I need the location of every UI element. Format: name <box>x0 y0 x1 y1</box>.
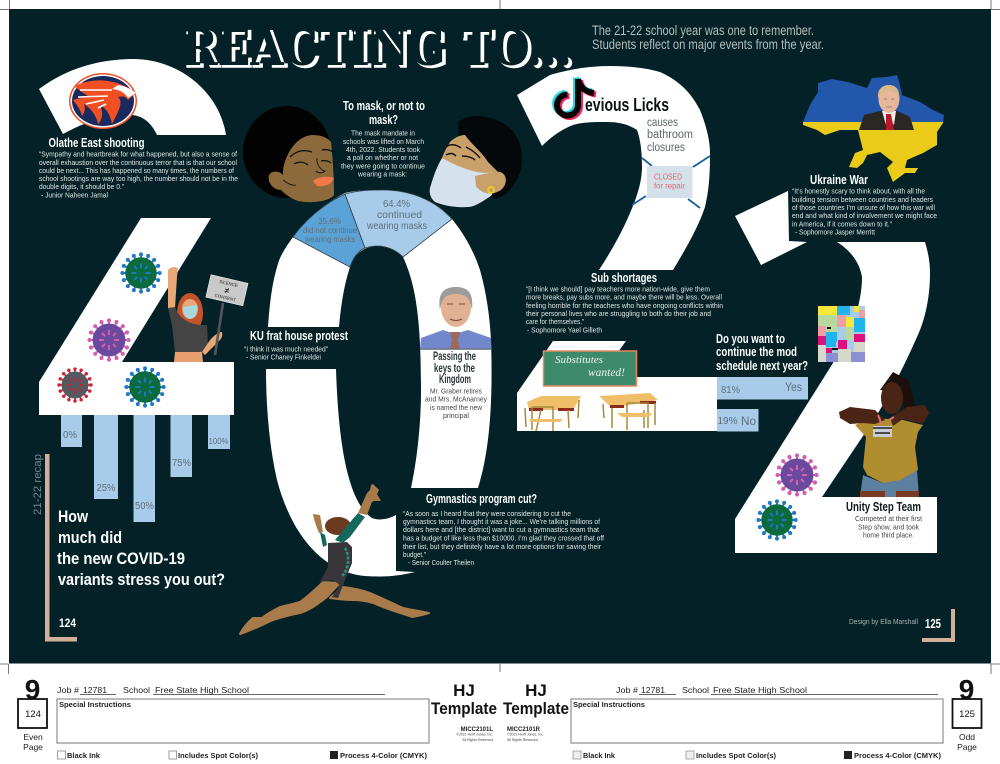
Sub shortages: “[I think we should] pay teachers more nation-wide, give them <box>526 284 710 294</box>
graphic: mod schedule pixel mosaic <box>818 306 865 362</box>
bar: no 19 percent: No <box>741 414 756 428</box>
Sub shortages: Sub shortages <box>591 271 657 285</box>
illustration: desks <box>525 393 658 431</box>
checkbox row: Includes Spot Color(s) <box>178 753 258 760</box>
Ukraine War: Ukraine War <box>810 173 868 187</box>
bar 75 percent: 75% <box>172 458 191 469</box>
job line: School <box>682 686 709 695</box>
bar 0 percent <box>61 415 82 447</box>
mod schedule poll: Do you want to <box>716 332 785 346</box>
odd page label: Page <box>957 742 977 752</box>
left job ticket <box>18 674 497 760</box>
Unity Step Team: Competed at their first <box>855 514 922 523</box>
number 2 top fragment <box>39 59 226 135</box>
page box 125: 125 <box>959 709 975 720</box>
even page label: Page <box>23 742 43 752</box>
odd page label: Odd <box>959 732 975 742</box>
icon: virus blue green top <box>122 254 160 292</box>
icon: virus purple <box>90 320 128 360</box>
To mask, or not to mask text: 4th, 2022. Students took <box>346 145 420 154</box>
Gymnastics program cut: their list, but they definitely have a lot more options for saving their <box>403 542 602 551</box>
bar: yes 81 percent: 81% <box>721 385 740 396</box>
HJ template left: ©2021 Herff Jones, Inc. <box>456 732 493 736</box>
Passing the keys to the Kingdom: Kingdom <box>439 372 471 386</box>
checkbox row <box>573 751 941 760</box>
slice: 64.4 percent: 64.4% <box>383 199 410 210</box>
COVID question heading: variants stress you out? <box>58 570 225 589</box>
slice: 35.6 percent: did not continue <box>303 225 357 235</box>
slice: 35.6 percent: wearing masks <box>304 234 355 244</box>
page box 125 <box>952 699 982 728</box>
Olathe East shooting: overall exhaustion over the continuous terror that is that our school <box>39 158 237 167</box>
title: REACTING TO... <box>185 20 575 79</box>
HJ template right <box>503 681 569 742</box>
Ukraine War: of those countries I’m unsure of how this war will <box>792 203 935 212</box>
To mask, or not to mask text: To mask, or not to <box>343 99 425 113</box>
checkbox row: Includes Spot Color(s) <box>696 753 776 760</box>
closed for repair sign <box>632 156 710 208</box>
COVID question heading: the new COVID-19 <box>57 549 185 568</box>
HJ template right: Template <box>503 699 569 718</box>
Devious Licks heading: evious Licks <box>585 95 669 115</box>
To mask, or not to mask text: wearing a mask: <box>357 170 407 178</box>
job line: 12781 <box>83 686 108 695</box>
even page label: Even <box>23 732 43 742</box>
special instructions box: Special Instructions <box>573 702 645 709</box>
Gymnastics program cut: - Senior Coulter Theilen <box>408 558 474 567</box>
slice: 64.4 percent <box>345 190 452 257</box>
job line: School <box>123 686 150 695</box>
bar 100 percent: 100% <box>208 437 228 446</box>
design credit: Design by Ella Marshall <box>849 617 918 626</box>
Passing the keys to the Kingdom <box>425 349 487 420</box>
illustration: protester with sign: SILENCE <box>219 279 238 288</box>
job line: Job # <box>616 686 639 695</box>
HJ template right: MICC2101R <box>507 727 541 733</box>
mod schedule poll: continue the mod <box>716 345 797 359</box>
job line: 12781 <box>641 686 666 695</box>
bar 75 percent <box>170 415 192 477</box>
chalkboard: substitutes wanted: wanted! <box>588 365 625 379</box>
odd page label <box>957 732 977 752</box>
illustration: man with mask <box>430 116 522 207</box>
number 2 middle curve <box>517 66 710 270</box>
Olathe East shooting: school shootings are way too high, the number should not be in the <box>39 174 238 183</box>
To mask, or not to mask text: a poll on whether or not <box>347 153 418 162</box>
bar 25 percent <box>94 415 118 499</box>
icon: virus blue green right <box>758 501 796 539</box>
bar: yes 81 percent <box>717 377 808 400</box>
icon: TikTok note <box>555 78 596 117</box>
To mask, or not to mask text: mask? <box>369 113 398 127</box>
HJ template right: HJ <box>525 681 547 700</box>
bar 50 percent: 50% <box>135 501 154 512</box>
HJ template left: MICC2101L <box>461 727 493 733</box>
Olathe East shooting: could be next... This has happened so many times, the numbers of <box>39 166 235 175</box>
Gymnastics program cut: “As soon as I heard that they were considering to cut the <box>403 509 571 518</box>
illustration: gymnast <box>240 484 429 634</box>
desk left <box>525 396 581 431</box>
Passing the keys to the Kingdom: principal <box>443 411 469 420</box>
page box 124: 124 <box>25 709 41 720</box>
HJ template left <box>431 681 497 742</box>
chalkboard: substitutes wanted: Substitutes <box>555 354 603 366</box>
KU frat house protest: - Senior Chaney Finkeldei <box>246 352 321 362</box>
Sub shortages: more breaks, pay subs more, and maybe there will be less. Overall <box>526 292 722 302</box>
Sub shortages <box>526 271 723 334</box>
Olathe East shooting: double digits, it should be 0.” <box>39 182 125 191</box>
Passing the keys to the Kingdom: is named the new <box>430 403 483 412</box>
number 2 middle base <box>517 341 717 431</box>
job line: Free State High School <box>713 686 807 695</box>
illustration: woman face <box>243 106 334 202</box>
COVID question heading: much did <box>58 528 122 547</box>
pie chart: mask poll <box>293 190 452 267</box>
Ukraine War: end and what kind of involvement we might face <box>792 211 937 220</box>
slice: 64.4 percent: wearing masks <box>366 221 427 232</box>
number 2 right upper hook <box>735 191 807 265</box>
HJ template left: All Rights Reserved <box>462 738 493 742</box>
Unity Step Team <box>846 500 922 540</box>
folio 125: 125 <box>925 616 941 631</box>
To mask, or not to mask text: schools was lifted on March <box>343 137 424 146</box>
To mask, or not to mask text <box>341 99 425 178</box>
Sub shortages: their personal lives who are struggling to both do their job and <box>526 309 711 318</box>
bar 25 percent: 25% <box>96 483 116 494</box>
Sub shortages: care for themselves.” <box>526 317 584 326</box>
Unity Step Team: Step show, and took <box>858 522 919 532</box>
job line: Free State High School <box>155 686 249 695</box>
slice: 35.6 percent: 35.6% <box>318 216 341 226</box>
COVID question heading: How <box>58 507 89 526</box>
Gymnastics program cut: dollars here and [the district] want to cut a gymnastics team that <box>403 525 599 534</box>
To mask, or not to mask text: The mask mandate in <box>351 128 415 138</box>
icon: virus blue green bottom <box>126 368 164 406</box>
chalkboard: substitutes wanted <box>544 351 636 386</box>
intro text <box>592 23 824 52</box>
bar 50 percent <box>134 415 155 522</box>
number 2 right body <box>735 242 937 553</box>
To mask, or not to mask text: they were going to continue <box>341 162 425 170</box>
HJ template right: All Rights Reserved <box>507 738 538 742</box>
mod schedule poll: schedule next year? <box>716 359 808 373</box>
checkbox row <box>58 751 427 760</box>
spine number 9 right: 9 <box>959 674 974 705</box>
checkbox row: Process 4-Color (CMYK) <box>854 753 941 760</box>
Ukraine War: building tension between countries and leaders <box>792 195 933 204</box>
Ukraine War: “It’s honestly scary to think about, with all the <box>792 186 925 196</box>
icon: eagle logo <box>69 73 137 129</box>
number 0 lower bowl <box>266 369 415 577</box>
bathroom closures text: closures <box>647 142 685 154</box>
bar 100 percent <box>208 415 230 449</box>
even page label <box>23 732 43 752</box>
illustration: protester with sign: CONSENT <box>214 293 237 302</box>
KU frat house protest <box>244 329 349 362</box>
special instructions box: Special Instructions <box>59 702 131 709</box>
folio 124: 124 <box>59 616 76 630</box>
icon: virus red <box>59 369 91 401</box>
checkbox row: Black Ink <box>67 753 100 760</box>
intro text: The 21-22 school year was one to remember. <box>592 23 814 38</box>
page box 124 <box>18 699 47 728</box>
Olathe East shooting: - Junior Naheen Jamal <box>41 190 108 200</box>
number 4 shape <box>39 218 234 415</box>
Passing the keys to the Kingdom: Passing the <box>433 349 476 363</box>
bathroom closures text: bathroom <box>647 129 693 141</box>
Unity Step Team: Unity Step Team <box>846 500 921 514</box>
special instructions box <box>571 699 943 743</box>
right page bracket <box>922 609 955 642</box>
Gymnastics program cut: Gymnastics program cut? <box>426 492 537 506</box>
bar: yes 81 percent: Yes <box>785 380 802 394</box>
number 0 upper arch <box>268 190 492 488</box>
slice: 35.6 percent <box>293 194 365 267</box>
checkbox row: Black Ink <box>583 753 615 760</box>
bar 0 percent: 0% <box>63 430 77 441</box>
section label: 21-22 recap: 21-22 recap <box>32 454 44 515</box>
bathroom closures text: causes <box>647 117 678 129</box>
Ukraine War <box>792 173 937 236</box>
slice: 64.4 percent: continued <box>377 210 422 221</box>
title: REACTING TO... <box>182 18 572 77</box>
Gymnastics program cut: budget.” <box>403 550 426 559</box>
Passing the keys to the Kingdom: and Mrs. McAnarney <box>425 394 487 404</box>
Gymnastics program cut <box>403 492 605 567</box>
Sub shortages: feeling horrible for the teachers who have ongoing conflicts within <box>526 301 723 310</box>
closed for repair sign: for repair <box>654 182 685 190</box>
KU frat house protest: “I think it was much needed” <box>244 344 329 354</box>
special instructions box <box>57 699 429 743</box>
bar chart: COVID stress <box>61 415 230 522</box>
HJ template left: HJ <box>453 681 475 700</box>
illustration: protester with sign <box>168 267 248 362</box>
job line: Job # <box>57 686 80 695</box>
Gymnastics program cut: has a budget of like less than $10000. I’m glad they crossed that off <box>403 534 605 542</box>
job line <box>57 686 385 695</box>
job line <box>616 686 938 695</box>
Ukraine War: - Sophomore Jasper Merritt <box>795 228 875 236</box>
Sub shortages: - Sophomore Yael Gilleth <box>527 326 602 334</box>
bar: no 19 percent: 19% <box>718 416 738 427</box>
desk right <box>599 393 658 430</box>
Gymnastics program cut: gymnastics team, I thought it was a joke... We’re talking millions of <box>403 517 601 526</box>
illustration: step team dancer <box>839 372 929 497</box>
bathroom closures text <box>647 117 693 154</box>
intro text: Students reflect on major events from the year. <box>592 37 824 52</box>
illustration: Ukraine map and Putin <box>803 75 944 182</box>
COVID question heading <box>57 507 225 589</box>
Unity Step Team: home third place. <box>863 530 914 540</box>
KU frat house protest: KU frat house protest <box>250 329 349 343</box>
icon: virus purple right <box>778 456 816 494</box>
Passing the keys to the Kingdom: Mr. Graber retires <box>430 386 482 396</box>
bar: no 19 percent <box>717 409 758 432</box>
mod schedule poll <box>716 332 808 432</box>
left page bracket <box>45 454 77 642</box>
right job ticket <box>503 674 982 760</box>
HJ template right: ©2021 Herff Jones, Inc. <box>507 732 544 736</box>
illustration: principal portrait <box>420 287 491 350</box>
HJ template left: Template <box>431 699 497 718</box>
Olathe East shooting: Olathe East shooting <box>48 136 144 150</box>
illustration: protester with sign: ≠ <box>224 286 231 296</box>
Passing the keys to the Kingdom: keys to the <box>434 361 475 375</box>
closed for repair sign: CLOSED <box>654 172 682 182</box>
Olathe East shooting <box>39 136 238 200</box>
spine number 9 left: 9 <box>25 674 40 705</box>
checkbox row: Process 4-Color (CMYK) <box>340 753 427 760</box>
Olathe East shooting: “Sympathy and heartbreak for what happened, but also a sense of <box>39 150 238 158</box>
Ukraine War: in America, if it comes down to it.” <box>792 220 893 228</box>
